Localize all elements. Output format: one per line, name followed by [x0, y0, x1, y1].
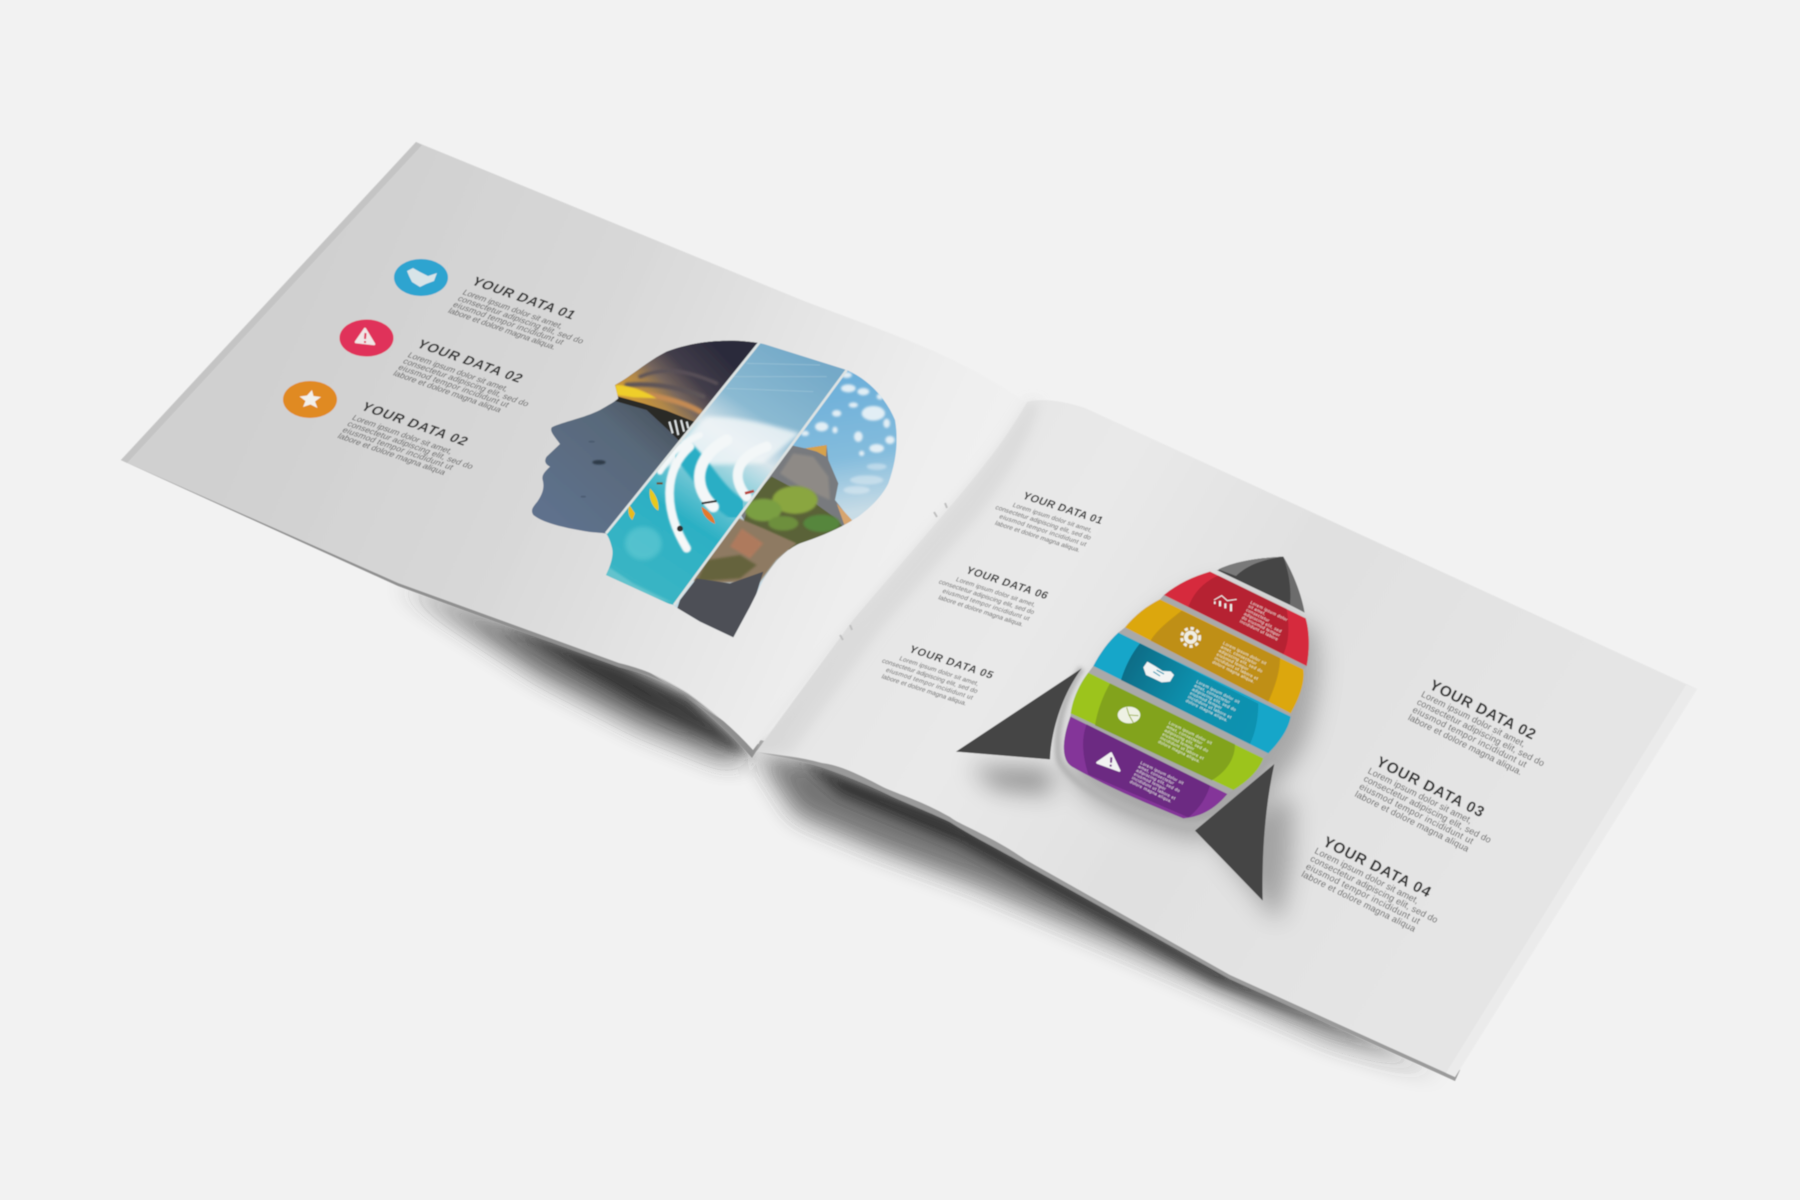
band text: green: Lorem ipsum dolor sit: [1168, 720, 1214, 746]
right fin: [1195, 764, 1274, 901]
cast shadow under right page: [756, 752, 1440, 1074]
text block: data 03 right: consectetur adipiscing elit, sed do: [1362, 774, 1493, 845]
text block: data 02 right: [1406, 676, 1558, 784]
band text: purple: dolore magna aliqua.: [1129, 779, 1173, 804]
text block: data 06: [929, 559, 1050, 630]
band text: blue: amet, consectetur: [1193, 683, 1232, 705]
band text: yellow: incididunt ut labore et: [1214, 656, 1260, 681]
text block: data 03 right: Lorem ipsum dolor sit amet,: [1366, 766, 1474, 826]
band text: purple: amet, consectetur: [1137, 764, 1176, 786]
text block: data 02 right: Lorem ipsum dolor sit amet,: [1419, 689, 1527, 749]
band text: yellow: adipiscing elit, sed do: [1218, 648, 1264, 674]
band text: yellow: Lorem ipsum dolor sit: [1222, 641, 1268, 666]
text block: data 03 right: labore et dolore magna aliqua: [1353, 789, 1472, 854]
band text: red: incididunt ut labore: [1239, 619, 1280, 642]
brochure mockup: [121, 142, 1697, 1081]
icon: pie chart: [1118, 707, 1140, 723]
list item 02: [340, 320, 548, 420]
band: green: [1071, 673, 1263, 790]
band text: blue: Lorem ipsum dolor sit: [1196, 679, 1241, 705]
text block 01: labore et dolore magna aliqua.: [446, 306, 559, 351]
text block 01: [446, 274, 603, 358]
binding staples: [840, 503, 947, 640]
text block: data 04 right: labore et dolore magna aliqua: [1300, 869, 1418, 934]
text block 02: Lorem ipsum dolor sit amet,: [406, 350, 511, 393]
band text: red: [1239, 600, 1290, 642]
band text: purple: adipiscing elit, sed do: [1135, 768, 1181, 793]
band text: purple: eiusmod tempor: [1133, 771, 1168, 791]
text block: data 02 right: labore et dolore magna aliqua.: [1406, 712, 1524, 777]
rocket drop shadows: [970, 585, 1318, 920]
text block: data 02 right: consectetur adipiscing elit, sed do: [1415, 697, 1546, 768]
text block: data 04 right: eiusmod tempor incididunt ut: [1304, 861, 1422, 926]
rocket infographic: [956, 557, 1318, 920]
band text: red: adipiscing elit, sed: [1243, 611, 1283, 634]
text block: data 04 right: consectetur adipiscing elit, sed do: [1309, 854, 1440, 925]
rocket nose cone: [1217, 557, 1305, 613]
text block: data 06: labore et dolore magna aliqua.: [937, 595, 1025, 628]
text block: data 06: eiusmod tempor incididunt ut: [941, 588, 1031, 623]
band text: green: incididunt ut labore et: [1159, 735, 1205, 761]
text block 04: [335, 399, 492, 483]
text block: data 05: consectetur adipiscing elit, sed do: [880, 658, 979, 695]
photo slice: mountain coast: [674, 370, 897, 638]
text block 02: labore et dolore magna aliqua: [391, 369, 504, 414]
band text: green: [1157, 720, 1214, 765]
band text: purple: [1129, 760, 1186, 805]
icon: handshake badge: [394, 259, 448, 296]
icon: star badge: [283, 381, 337, 418]
panel: left page: [121, 142, 898, 750]
band text: green: dolore magna aliqua.: [1157, 739, 1201, 764]
text block: data 06: consectetur adipiscing elit, sed do: [937, 579, 1036, 616]
text block: data 04 right: Lorem ipsum dolor sit amet,: [1313, 846, 1421, 906]
icon: warning triangle: [1097, 753, 1119, 771]
photo slice dividers: [606, 343, 847, 605]
text block: data 06: YOUR DATA 06: [963, 565, 1050, 602]
text block: data 03 right: eiusmod tempor incididunt ut: [1357, 781, 1476, 846]
band text: blue: [1185, 679, 1242, 724]
band: purple: [1064, 717, 1227, 818]
text block: data 05: labore et dolore magna aliqua.: [880, 674, 968, 707]
icon: warning badge: [340, 320, 394, 356]
text block 01: consectetur adipiscing elit, sed do: [456, 294, 587, 346]
text block: data 01: consectetur adipiscing elit, sed do: [994, 504, 1093, 542]
binding strip: [121, 142, 422, 463]
text block: data 03 right: YOUR DATA 03: [1373, 754, 1487, 821]
band text: blue: adipiscing elit, sed do: [1191, 687, 1237, 712]
text block: data 01: [986, 485, 1105, 555]
silver hull ring: [1058, 668, 1274, 825]
band: yellow: [1125, 599, 1304, 713]
band: blue: [1093, 633, 1291, 753]
band text: red: do eiusmod tempor: [1241, 615, 1282, 638]
band text: blue: eiusmod tempor: [1189, 690, 1224, 710]
text block: data 02 right: YOUR DATA 02: [1426, 677, 1539, 743]
band text: yellow: dolore magna aliqua.: [1212, 659, 1256, 684]
text block: data 01: eiusmod tempor incididunt ut: [998, 514, 1088, 548]
cast shadow under left page: [400, 585, 752, 762]
band text: yellow: [1212, 641, 1268, 685]
band text: red: Lorem ipsum dolor: [1250, 600, 1289, 622]
right page fore-edge strip: [1446, 685, 1697, 1077]
page block edge: right: [756, 740, 1460, 1081]
page block edge: left: [121, 452, 760, 758]
text block: data 04 right: YOUR DATA 04: [1320, 834, 1434, 901]
text block: data 05: eiusmod tempor incididunt ut: [884, 667, 974, 702]
photo slice: sunset pier: [532, 340, 758, 534]
text block: data 02 right: eiusmod tempor incididunt ut: [1411, 705, 1529, 769]
text block 01: YOUR DATA 01: [469, 274, 580, 322]
band text: blue: incididunt ut labore et: [1187, 694, 1233, 720]
left page sheet: [121, 142, 1025, 750]
head silhouette photo collage: [532, 340, 897, 638]
text block 04: consectetur adipiscing elit, sed do: [345, 419, 476, 471]
text block: data 05: [873, 638, 995, 710]
band text: blue: dolore magna aliqua.: [1185, 698, 1229, 723]
text block: data 01: YOUR DATA 01: [1020, 491, 1105, 527]
text block 04: YOUR DATA 02: [358, 399, 472, 448]
text block 04: labore et dolore magna aliqua: [335, 431, 448, 477]
text block: data 04 right: [1300, 832, 1452, 940]
list item 03: [283, 381, 492, 483]
right page sheet: [756, 400, 1697, 1077]
rocket band backing: [1064, 572, 1309, 818]
band text: red: sit amet,: [1247, 604, 1267, 616]
text block 01: Lorem ipsum dolor sit amet,: [460, 288, 566, 330]
crease shading: [756, 402, 1040, 755]
text block: data 03 right: [1353, 752, 1505, 860]
text block 02: consectetur adipiscing elit, sed do: [401, 357, 532, 408]
band text: green: adipiscing elit, sed do: [1164, 728, 1210, 753]
band text: yellow: amet, consectetur: [1220, 644, 1258, 666]
text block 04: Lorem ipsum dolor sit amet,: [350, 413, 455, 456]
text block: data 05: Lorem ipsum dolor sit amet,: [898, 656, 980, 688]
text block 02: YOUR DATA 02: [414, 337, 527, 385]
text block: data 05: YOUR DATA 05: [907, 644, 995, 681]
band text: red: consectetur: [1245, 607, 1271, 623]
band text: purple: Lorem ipsum dolor sit: [1140, 760, 1185, 786]
band text: green: amet, consectetur: [1166, 724, 1204, 746]
text block 02: eiusmod tempor incididunt ut: [396, 363, 512, 409]
list item 01: [394, 259, 603, 358]
photo slice: surfers: [606, 343, 846, 606]
text block 02: [391, 336, 548, 420]
text block 01: eiusmod tempor incididunt ut: [451, 300, 567, 346]
band text: yellow: eiusmod tempor: [1216, 652, 1250, 672]
icon: gear: [1182, 628, 1200, 646]
band: red: [1164, 572, 1309, 666]
text block: data 01: labore et dolore magna aliqua.: [993, 520, 1082, 554]
text block: data 06: Lorem ipsum dolor sit amet,: [954, 577, 1037, 609]
panel: right page: [756, 400, 1697, 1077]
icon: bar chart: [1214, 596, 1237, 611]
band text: purple: incididunt ut labore et: [1131, 775, 1177, 801]
text block: data 01: Lorem ipsum dolor sit amet,: [1011, 502, 1094, 534]
text block 04: eiusmod tempor incididunt ut: [340, 425, 456, 472]
band text: green: eiusmod tempor: [1161, 731, 1196, 751]
icon: handshake: [1143, 662, 1174, 682]
left fin: [956, 668, 1082, 759]
